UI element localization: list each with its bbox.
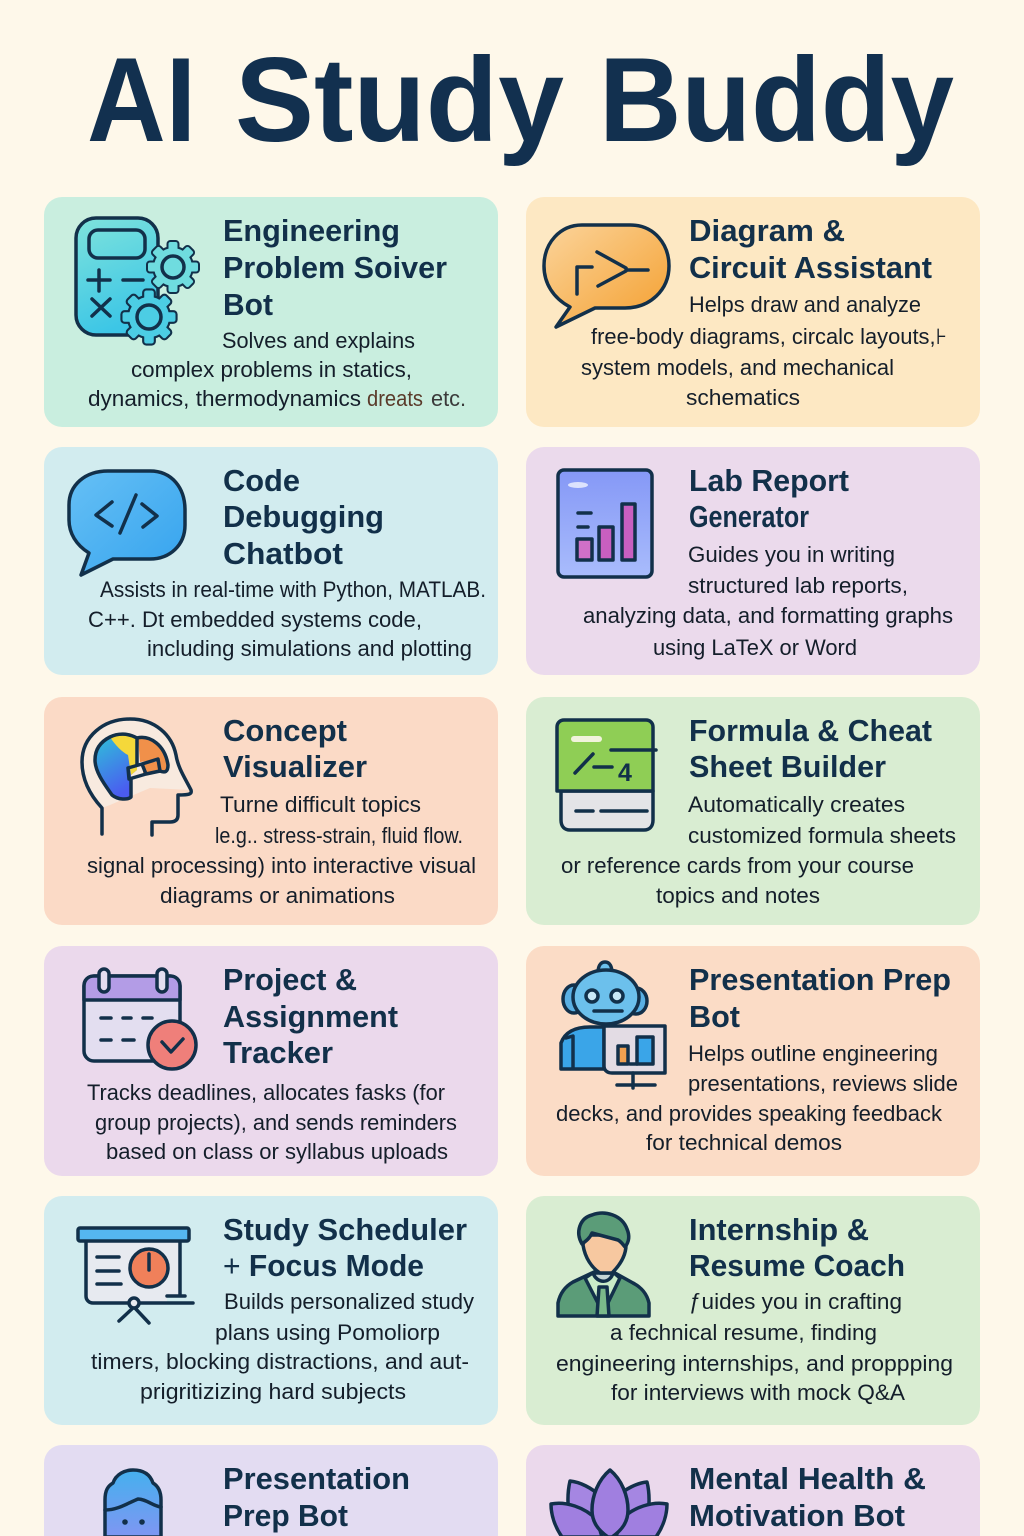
title: AI	[87, 33, 196, 167]
description: Assists in real-time with Python, MATLAB.	[100, 577, 486, 602]
description: schematics	[686, 385, 800, 410]
description: ƒuides you in crafting	[689, 1289, 902, 1314]
description: free-body diagrams, circalc layouts,⊦	[591, 324, 947, 349]
heading	[223, 213, 447, 322]
heading: Visualizer	[223, 749, 367, 784]
description: for technical demos	[646, 1130, 842, 1155]
description: structured lab reports,	[688, 573, 908, 598]
description	[556, 1041, 958, 1155]
description: group projects), and sends reminders	[95, 1110, 457, 1135]
description: Turne difficult topics	[220, 792, 421, 817]
heading: Prep Bot	[223, 1498, 348, 1533]
description: le.g.. stress-strain, fluid flow.	[215, 823, 463, 848]
panel: Presentation Prep Bot	[526, 946, 980, 1176]
panel: Study Scheduler + Focus Mode	[44, 1196, 498, 1425]
description: decks, and provides speaking feedback	[556, 1101, 943, 1126]
card background	[44, 1196, 498, 1425]
heading	[223, 713, 367, 784]
icon: code speech bubble	[69, 471, 185, 575]
description: signal processing) into interactive visual	[87, 853, 476, 878]
heading: Problem Soiver	[223, 250, 447, 285]
panel: Code Debugging Chatbot	[44, 447, 498, 675]
heading	[689, 1461, 926, 1533]
heading: + Focus Mode	[223, 1248, 424, 1283]
heading: Code	[223, 463, 300, 498]
icon: head with colourful brain	[82, 719, 191, 835]
heading	[223, 1212, 467, 1283]
icon: formula sheet: 4	[618, 759, 632, 787]
card background	[526, 447, 980, 675]
description	[87, 1080, 457, 1164]
title: Buddy	[599, 33, 954, 167]
description: using LaTeX or Word	[653, 635, 857, 660]
card background	[526, 1445, 980, 1536]
heading: Internship &	[689, 1212, 869, 1247]
heading: Bot	[689, 999, 740, 1034]
heading: Debugging	[223, 499, 384, 534]
heading: Engineering	[223, 213, 400, 248]
description: analyzing data, and formatting graphs	[583, 603, 953, 628]
panel: Lab Report Generator	[526, 447, 980, 675]
icon: circuit speech bubble	[544, 225, 669, 327]
heading: Presentation	[223, 1461, 410, 1496]
description: Guides you in writing	[688, 542, 895, 567]
description: dynamics, thermodynamics	[88, 386, 361, 411]
description: including simulations and plotting	[147, 636, 472, 661]
panel: Internship & Resume Coach	[526, 1196, 980, 1425]
heading: Assignment	[223, 999, 398, 1034]
icon: calendar with check	[84, 969, 196, 1069]
title	[87, 33, 954, 167]
description: Helps draw and analyze	[689, 292, 921, 317]
icon: formula sheet	[557, 720, 656, 830]
panel: Presentation Prep Bot (bottom)	[44, 1445, 498, 1536]
heading: Project &	[223, 962, 357, 997]
heading	[689, 713, 932, 784]
card background	[526, 197, 980, 427]
panel: Project & Assignment Tracker	[44, 946, 498, 1176]
description: C++. Dt embedded systems code,	[88, 607, 422, 632]
heading: Generator	[689, 499, 809, 534]
heading: Diagram &	[689, 213, 845, 248]
heading	[689, 463, 849, 534]
description	[88, 328, 466, 411]
description: diagrams or animations	[160, 883, 395, 908]
heading: Formula & Cheat	[689, 713, 932, 748]
card background	[44, 197, 498, 427]
description: Solves and explains	[222, 328, 415, 353]
description: etc.	[431, 386, 466, 411]
description	[556, 1289, 953, 1405]
card background	[44, 697, 498, 925]
description: system models, and mechanical	[581, 355, 894, 380]
heading: Bot	[223, 287, 273, 322]
icon: bar chart report	[558, 470, 652, 577]
description: complex problems in statics,	[131, 357, 412, 382]
description: a fechnical resume, finding	[610, 1320, 877, 1345]
description	[87, 792, 476, 908]
description: plans using Pomoliorp	[215, 1320, 440, 1345]
panel: Mental Health & Motivation Bot	[526, 1445, 980, 1536]
description	[88, 577, 486, 661]
card background	[44, 447, 498, 675]
heading	[223, 463, 384, 571]
icon: robot with chart screen	[561, 962, 665, 1088]
icon: lotus flower	[551, 1470, 667, 1536]
card background	[44, 946, 498, 1176]
description: Builds personalized study	[224, 1289, 474, 1314]
heading: Concept	[223, 713, 347, 748]
description: dreats	[367, 386, 423, 411]
description: based on class or syllabus uploads	[106, 1139, 448, 1164]
heading	[223, 1461, 410, 1533]
description	[561, 792, 956, 908]
heading: Circuit Assistant	[689, 250, 932, 285]
heading: Tracker	[223, 1035, 333, 1070]
description: topics and notes	[656, 883, 820, 908]
description	[91, 1289, 474, 1404]
description: or reference cards from your course	[561, 853, 914, 878]
description: engineering internships, and proppping	[556, 1351, 953, 1376]
heading: Resume Coach	[689, 1248, 905, 1283]
heading: Mental Health &	[689, 1461, 926, 1496]
description: customized formula sheets	[688, 823, 956, 848]
panel: Concept Visualizer	[44, 697, 498, 925]
description: prigritizizing hard subjects	[140, 1379, 406, 1404]
panel: Engineering Problem Solver Bot	[44, 197, 498, 427]
icon: face with blue hair	[105, 1470, 161, 1536]
heading	[689, 1212, 905, 1283]
icon: calculator with gears	[76, 218, 198, 344]
title: Study	[235, 33, 564, 167]
heading	[689, 962, 951, 1034]
heading	[223, 962, 398, 1070]
panel: Formula & Cheat Sheet Builder	[526, 697, 980, 925]
heading	[689, 213, 932, 285]
heading: Sheet Builder	[689, 749, 886, 784]
description: Automatically creates	[688, 792, 905, 817]
card background	[526, 1196, 980, 1425]
description	[583, 542, 953, 660]
heading: Lab Report	[689, 463, 849, 498]
card background	[526, 697, 980, 925]
description: timers, blocking distractions, and aut-	[91, 1349, 469, 1374]
card background	[526, 946, 980, 1176]
heading: Presentation Prep	[689, 962, 951, 997]
description	[581, 292, 947, 410]
description: for interviews with mock Q&A	[611, 1380, 905, 1405]
description: Helps outline engineering	[688, 1041, 938, 1066]
card background	[44, 1445, 498, 1536]
icon: person in suit	[558, 1213, 649, 1316]
description: presentations, reviews slide	[688, 1071, 958, 1096]
heading: Chatbot	[223, 536, 343, 571]
heading: Motivation Bot	[689, 1498, 905, 1533]
panel: Diagram & Circuit Assistant	[526, 197, 980, 427]
icon: projector screen with timer	[78, 1228, 193, 1323]
description: Tracks deadlines, allocates fasks (for	[87, 1080, 445, 1105]
heading: Study Scheduler	[223, 1212, 467, 1247]
